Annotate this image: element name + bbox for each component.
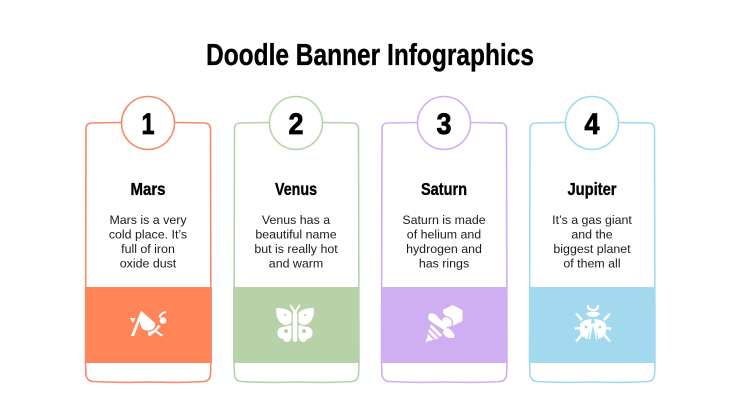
number badge: 1: [142, 108, 154, 141]
description: Mars is a very: [109, 213, 187, 227]
number badge: 4: [584, 108, 600, 141]
description: but is really hot: [254, 242, 338, 256]
description: full of iron: [121, 242, 175, 256]
description: beautiful name: [255, 228, 337, 242]
colour band: [233, 287, 360, 363]
description: and warm: [269, 256, 323, 270]
heading: Jupiter: [568, 179, 617, 199]
description: oxide dust: [120, 256, 177, 270]
description: of helium and: [407, 228, 481, 242]
title: Doodle Banner Infographics: [206, 37, 534, 72]
card outline: [382, 122, 507, 382]
description: cold place. It’s: [109, 228, 187, 242]
description: Venus has a: [262, 213, 330, 227]
colour band: [529, 287, 656, 363]
description: Saturn is made: [402, 213, 486, 227]
number badge: [122, 96, 174, 150]
card outline: [234, 122, 359, 382]
number badge: [566, 96, 618, 150]
icon: grasshopper: [130, 311, 166, 336]
heading: Mars: [130, 179, 166, 199]
description: and the: [571, 228, 613, 242]
icon: bee and honeycomb: [426, 305, 462, 342]
description: biggest planet: [553, 242, 631, 256]
panel: Jupiter: [529, 96, 656, 382]
description: of them all: [563, 256, 621, 270]
panel: Saturn: [381, 96, 508, 382]
colour band: [381, 287, 508, 363]
heading: Venus: [275, 179, 317, 199]
number badge: [270, 96, 322, 150]
description: has rings: [419, 256, 469, 270]
description: It’s a gas giant: [552, 213, 632, 227]
panel: Mars: [85, 96, 212, 382]
icon: beetle: [574, 305, 612, 342]
icon: butterfly: [276, 304, 314, 342]
colour band: [85, 287, 212, 363]
panel: Venus: [233, 96, 360, 382]
number badge: 2: [288, 108, 304, 141]
description: hydrogen and: [406, 242, 482, 256]
heading: Saturn: [421, 179, 467, 199]
number badge: [418, 96, 470, 150]
number badge: 3: [436, 108, 452, 141]
card outline: [530, 122, 655, 382]
card outline: [86, 122, 211, 382]
